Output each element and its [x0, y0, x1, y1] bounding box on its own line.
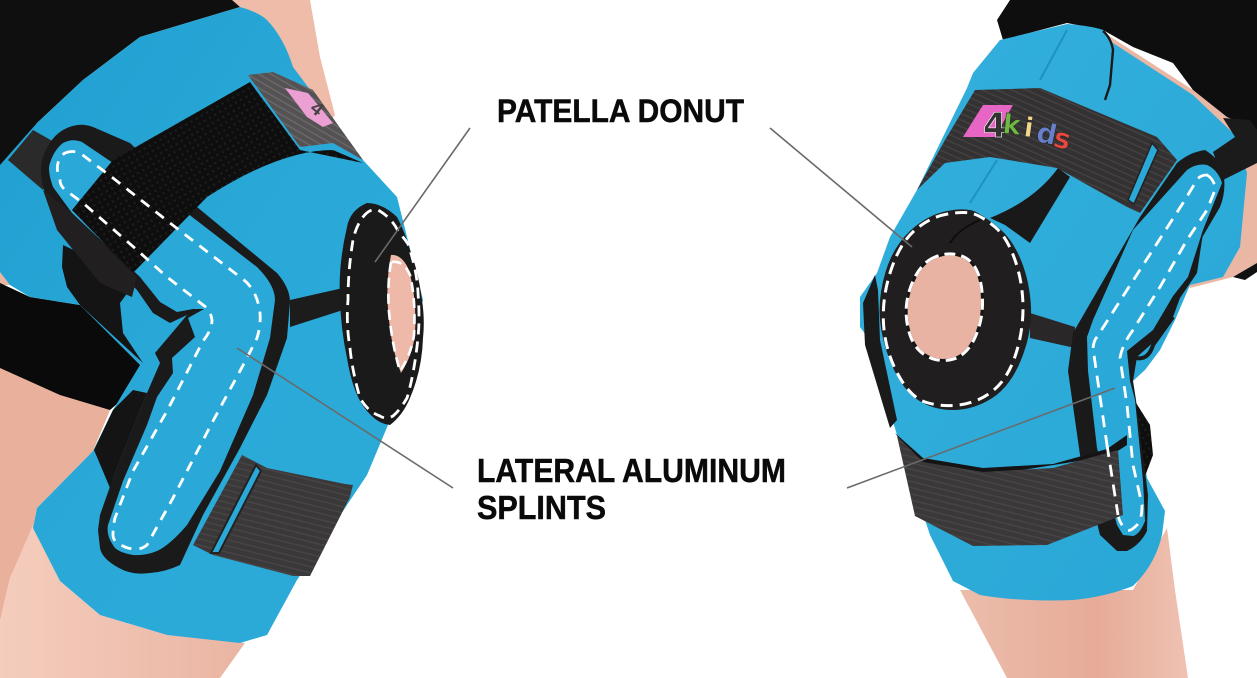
- right: top velcro-strap with logo: [917, 88, 1177, 213]
- right: splint dashed outline: [1093, 175, 1215, 530]
- left: splint blue pad: [49, 140, 275, 555]
- right: back strap: [1213, 118, 1257, 180]
- left: velcro strap: [72, 82, 363, 273]
- left knee photo: [0, 0, 424, 678]
- right: donut fold: [950, 220, 980, 243]
- right: flap seam top: [1040, 30, 1067, 80]
- right: 4kids logo: [963, 105, 1074, 157]
- leader line: left patella donut: [375, 128, 470, 262]
- right: strap band: [897, 436, 1123, 546]
- left: black shorts: [0, 283, 143, 410]
- left: partial logo character: 4: [306, 98, 328, 121]
- left: knit mesh lower: [94, 390, 147, 488]
- left: patella donut: [340, 203, 424, 425]
- left: buckle slot: [211, 465, 261, 553]
- left: small skin patch at edge: [0, 265, 12, 285]
- right: rear skin behind the brace: [1100, 30, 1257, 288]
- left: knee opening: [387, 255, 415, 373]
- left: lateral splint pad: [41, 125, 290, 574]
- label: patella donut: PATELLA DONUT: [497, 93, 744, 129]
- right: logo d: d: [1034, 116, 1060, 152]
- left: strap band: [193, 455, 353, 576]
- right: lateral splint pad: [1068, 150, 1224, 551]
- right: elastic lower strap: [895, 433, 1127, 546]
- left: fold strap edge: [43, 190, 137, 297]
- right: blue brace body: [860, 24, 1247, 600]
- right: grey ribbed strap: [917, 88, 1177, 213]
- right: logo i: i: [1022, 112, 1036, 144]
- right: buckle slot: [1128, 143, 1158, 204]
- right: side edge strip: [863, 275, 897, 428]
- left: splint dashed outline: [57, 152, 260, 549]
- right: black shirt: [997, 0, 1257, 130]
- left: elastic lower strap: [193, 455, 353, 576]
- leader line: left lateral splint: [237, 348, 453, 488]
- right: upper flap edge: [1103, 31, 1113, 100]
- right: knit mesh: [1118, 398, 1153, 507]
- left: knit mesh upper: [62, 245, 143, 363]
- right knee photo: [860, 0, 1257, 678]
- right: small black hem: [1233, 263, 1257, 280]
- left: black shirt: [0, 0, 240, 170]
- left: blue brace body: [0, 7, 423, 643]
- left: dashed outline outer: [347, 210, 419, 418]
- left: grey ribbed tab: [248, 72, 363, 160]
- left: pink logo patch: [285, 88, 333, 127]
- right: lower leg skin: [960, 528, 1188, 678]
- right: strap dashed segment: [1107, 445, 1118, 515]
- right: patella donut: [880, 209, 1031, 410]
- right: seam beside bulge: [1128, 317, 1173, 358]
- right: dashed outline inner: [906, 254, 983, 361]
- left: dashed outline inner: [388, 262, 414, 371]
- left: lower leg skin: [0, 525, 245, 678]
- right: knee opening: [906, 254, 983, 361]
- left: splint black binding: [41, 125, 290, 574]
- right: logo k: k: [1001, 109, 1023, 142]
- left: donut ring: [340, 203, 424, 425]
- right: dashed outline outer: [883, 212, 1023, 406]
- label: lateral aluminum splints: SPLINTS: [477, 489, 606, 526]
- left: back strap loop: [8, 130, 63, 190]
- right: logo s: s: [1050, 121, 1074, 157]
- leader line: right patella donut: [770, 128, 912, 247]
- right: splint blue pad: [1087, 165, 1222, 536]
- left: lower leg back skin: [0, 360, 110, 621]
- right: strap black top edge: [895, 433, 1127, 476]
- right: donut ring: [880, 209, 1031, 410]
- right: dark fold behind pad: [1155, 233, 1203, 340]
- label: lateral aluminum splints: LATERAL ALUMINUM: [477, 452, 786, 489]
- right: flap seam bottom: [970, 160, 997, 203]
- right: pink square logo: [963, 105, 1013, 137]
- right: cross strap to donut: [1030, 313, 1075, 348]
- right: black strap under flap: [990, 168, 1070, 243]
- left: grey tab with logo: [248, 72, 363, 160]
- right: logo digit: 4: [983, 106, 1007, 146]
- right: splint black binding: [1068, 150, 1224, 551]
- left: upper leg skin: [225, 0, 335, 160]
- left: cross strap to donut: [290, 288, 343, 327]
- leader line: right lateral splint: [847, 388, 1115, 488]
